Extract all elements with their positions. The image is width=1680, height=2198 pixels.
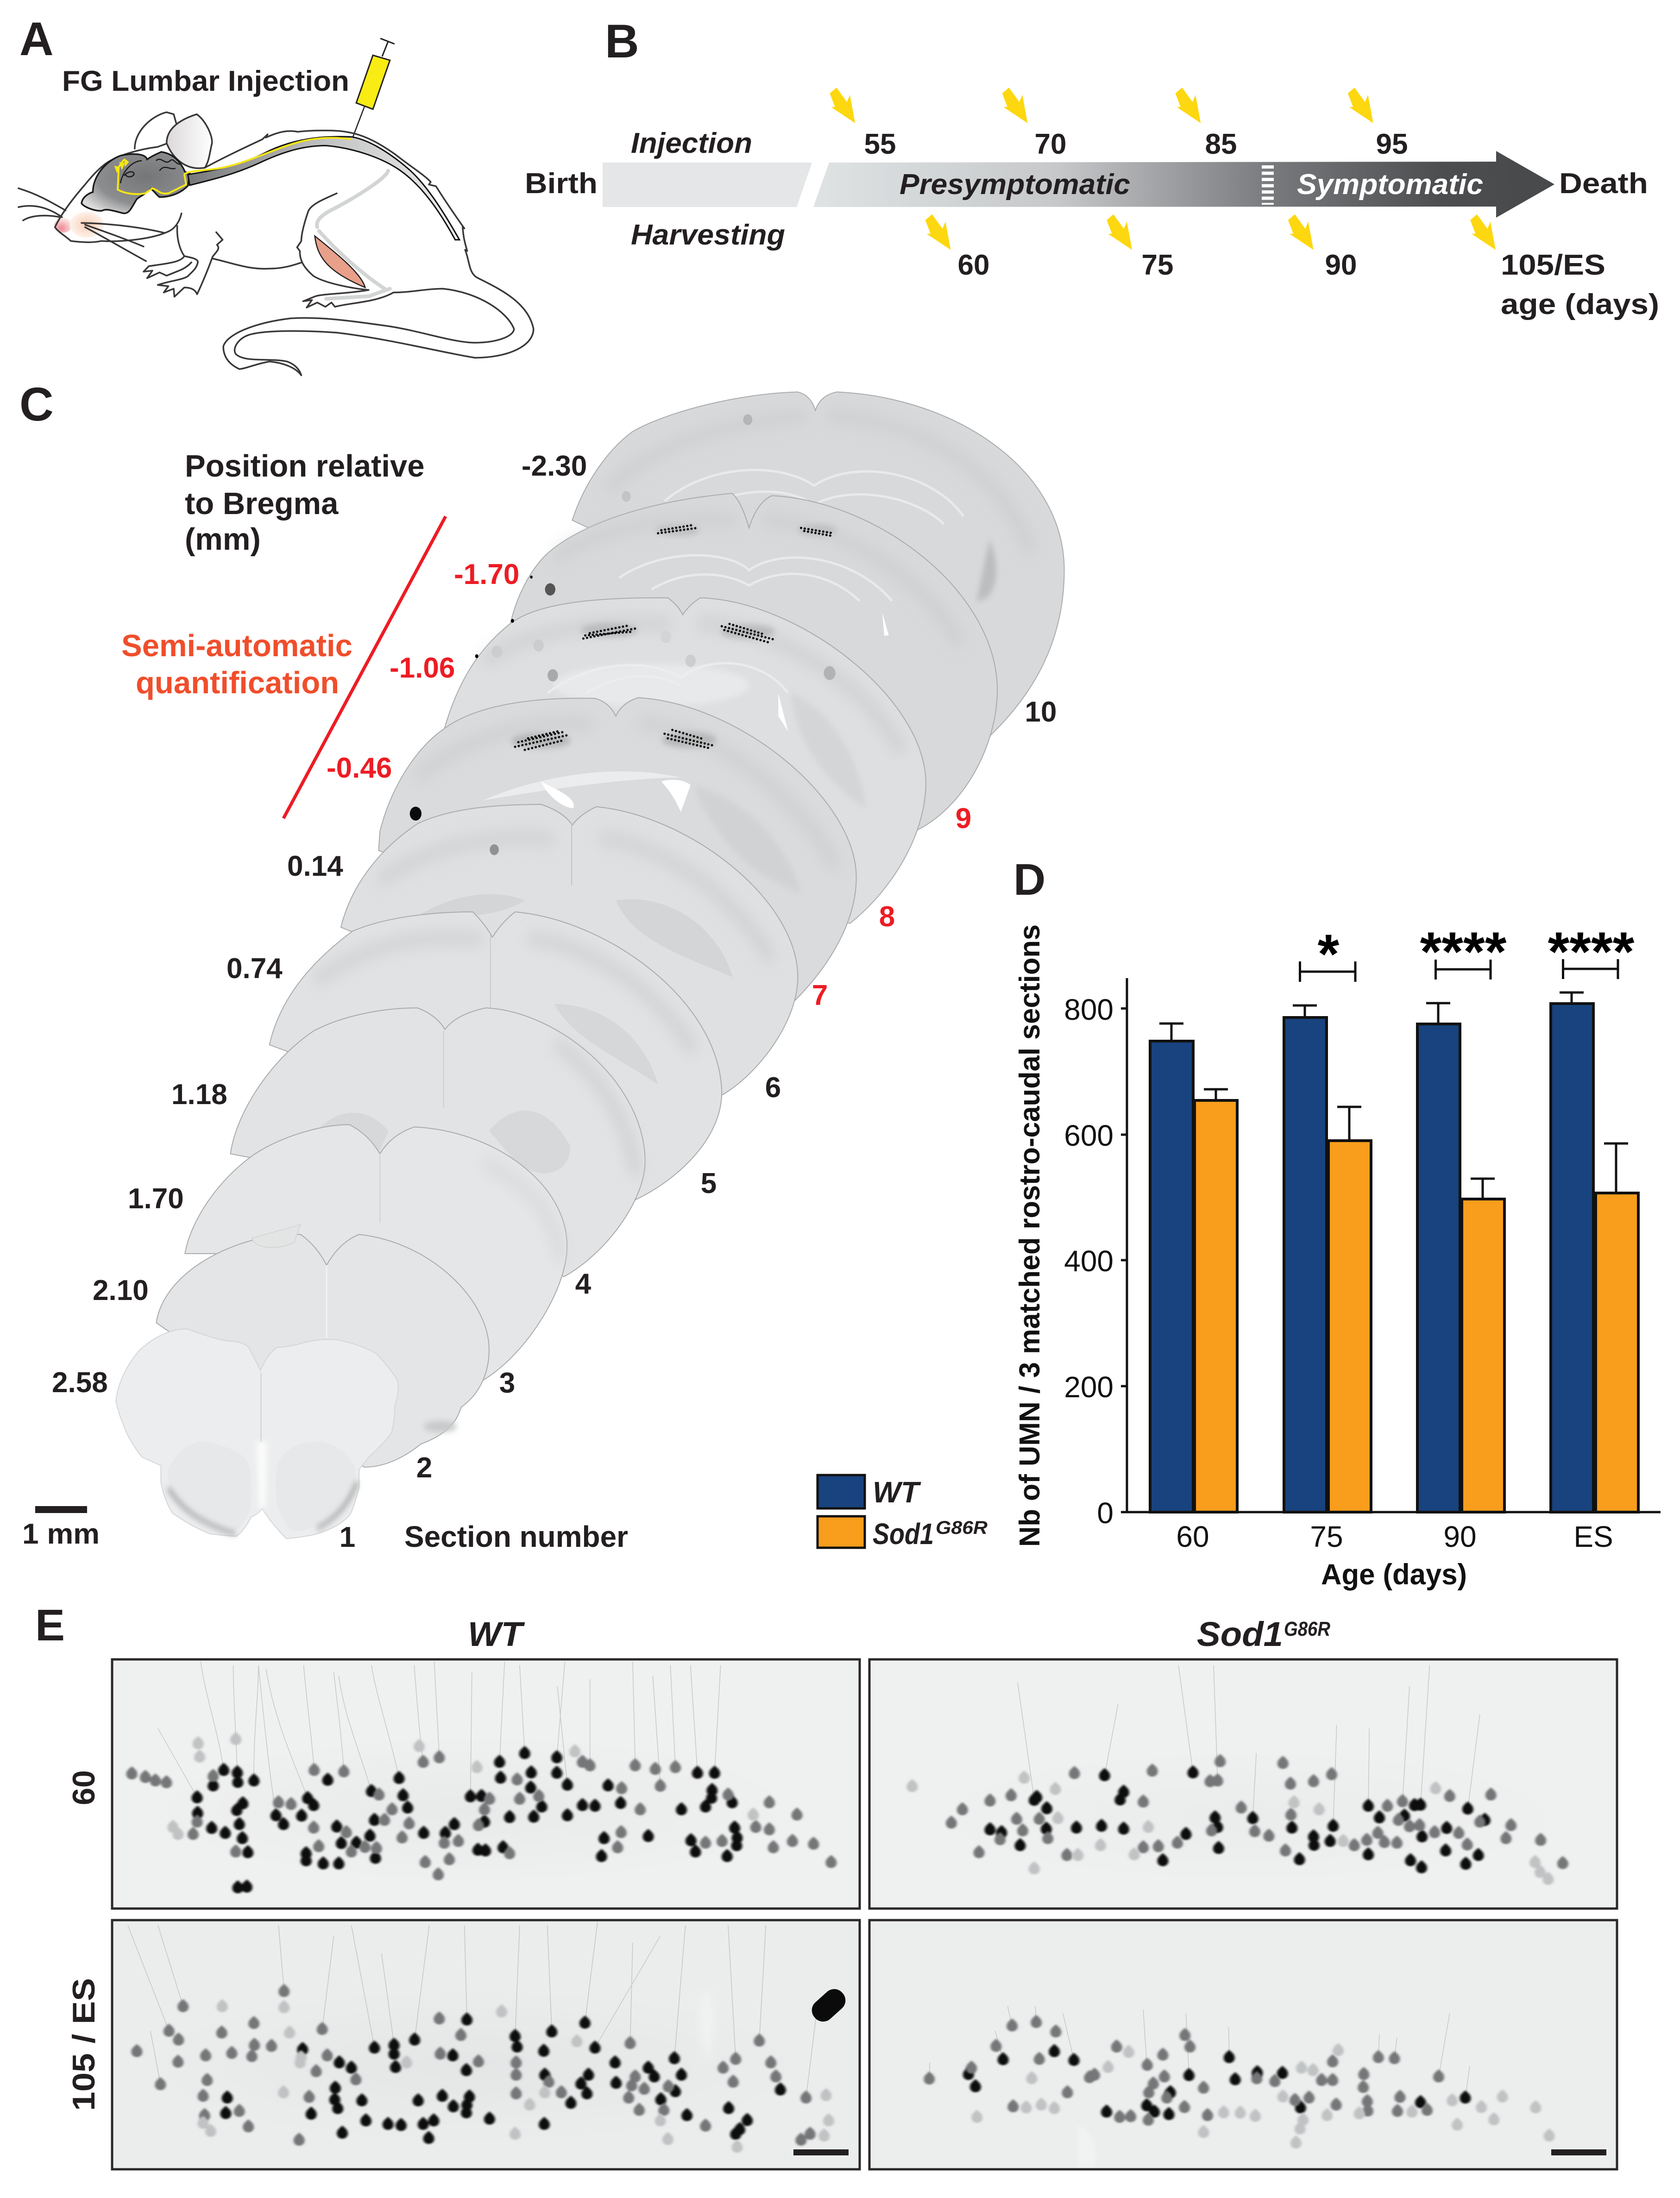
section numbers: 3 (499, 1367, 515, 1399)
bregma position heading (185, 449, 425, 557)
row label 60: 60 (66, 1770, 101, 1805)
x axis tick labels: 60 (1176, 1520, 1209, 1553)
y axis title: Nb of UMN / 3 matched rostro-caudal sections (1014, 924, 1046, 1547)
bregma position values: -1.06 (390, 652, 455, 684)
bregma position values: 1.70 (128, 1183, 184, 1215)
section 3 (185, 1124, 567, 1384)
arrows: injection and harvesting times (830, 88, 1496, 250)
column title Sod1 G86R: Sod1 (1197, 1615, 1283, 1653)
disease progression arrow (813, 151, 1554, 218)
section numbers (340, 696, 1057, 1553)
legend (818, 1475, 988, 1551)
semi-automatic quantification label: quantification (136, 666, 339, 700)
significance stars (1318, 921, 1635, 985)
section 4 (230, 1008, 645, 1277)
panel letter D: D (1013, 855, 1045, 904)
panel D: bar chart (1014, 921, 1661, 1591)
bregma position values: 1.18 (171, 1079, 227, 1111)
section number caption: Section number (404, 1520, 628, 1553)
semi-automatic quantification label (121, 628, 352, 700)
column title Sod1 G86R: G86R (1284, 1618, 1330, 1640)
y axis tick labels: 0 (1097, 1496, 1114, 1530)
section numbers: 5 (701, 1168, 717, 1199)
bregma position heading: (mm) (185, 522, 261, 557)
timeline labels: 105/ES (1501, 249, 1605, 281)
brain (82, 152, 189, 214)
timeline labels (525, 127, 1659, 320)
section 10 (572, 392, 1064, 738)
timeline labels: Harvesting (631, 219, 785, 251)
pre-injection bar (603, 163, 812, 207)
mouse body outline (55, 131, 534, 375)
timeline labels: 95 (1376, 128, 1408, 160)
timeline labels: Birth (525, 168, 598, 200)
x axis tick labels (1176, 1520, 1613, 1553)
panel letter B: B (605, 15, 639, 68)
x axis tick labels: 75 (1310, 1520, 1343, 1553)
x axis tick labels: 90 (1443, 1520, 1477, 1553)
semi-automatic quantification range line (283, 516, 446, 818)
column title WT: WT (468, 1615, 525, 1653)
section numbers: 7 (812, 980, 828, 1011)
timeline labels: Presymptomatic (900, 169, 1130, 201)
panel E: micrograph WT day 60 (112, 1659, 860, 1909)
panel C: serial brain sections (116, 392, 1064, 1539)
section numbers: 2 (416, 1452, 432, 1484)
panel E: micrograph WT day 105 / ES (112, 1920, 860, 2169)
gastrocnemius muscle (315, 236, 365, 288)
column title Sod1 G86R (1197, 1615, 1330, 1653)
panel A: mouse illustration (19, 38, 534, 375)
disease onset dashed divider (1262, 165, 1274, 205)
y axis tick labels: 200 (1064, 1370, 1114, 1404)
section numbers: 10 (1025, 696, 1057, 728)
section numbers: 4 (575, 1268, 591, 1300)
timeline labels: 90 (1325, 249, 1357, 281)
Sod1 G86R bars (1195, 1100, 1638, 1512)
timeline labels: Injection (631, 127, 752, 159)
scale bar (793, 2149, 849, 2155)
error bars (1159, 992, 1628, 1199)
bregma position values: 0.14 (287, 850, 343, 882)
section 5 (270, 912, 722, 1201)
bregma position values: 2.10 (93, 1275, 149, 1306)
scale bar 1 mm: 1 mm (22, 1518, 100, 1550)
significance stars: **** (1548, 921, 1635, 983)
section numbers: 8 (879, 901, 895, 933)
bregma position values: 0.74 (227, 953, 283, 985)
bregma position values: -2.30 (522, 450, 587, 482)
mouse nose and whisker pad (54, 212, 104, 238)
WT bars (1150, 1004, 1593, 1512)
section 6 (341, 804, 798, 1096)
x axis title: Age (days) (1321, 1558, 1467, 1591)
timeline labels: age (days) (1501, 289, 1659, 320)
significance stars: **** (1420, 921, 1507, 983)
section numbers: 1 (340, 1521, 355, 1553)
y axis tick labels: 800 (1064, 993, 1114, 1026)
whiskers (19, 188, 165, 261)
section 7 (378, 697, 856, 1004)
icon: syringe (352, 38, 395, 139)
spinal cord (188, 137, 459, 240)
timeline labels: Symptomatic (1297, 169, 1483, 201)
section 8 (444, 598, 926, 923)
row label 105 / ES: 105 / ES (66, 1978, 101, 2111)
bregma position heading: Position relative (185, 449, 425, 484)
x axis tick labels: ES (1573, 1520, 1613, 1553)
significance brackets (1300, 959, 1618, 982)
bregma position values: -0.46 (327, 752, 392, 784)
dark debris blob (807, 1984, 850, 2026)
semi-automatic quantification label: Semi-automatic (121, 628, 352, 663)
section 1 (116, 1329, 398, 1539)
legend: WT (873, 1476, 921, 1509)
mouse ears (135, 112, 212, 168)
panel letter A: A (19, 13, 54, 65)
fluorogold tracer path (114, 138, 351, 194)
section numbers: 9 (956, 803, 971, 835)
scale bar (1551, 2149, 1606, 2155)
hind limb bones (317, 171, 390, 299)
panel letter C: C (19, 378, 54, 431)
legend: Sod1 (873, 1517, 934, 1551)
timeline labels: 60 (958, 249, 989, 281)
bregma position heading: to Bregma (185, 486, 339, 521)
timeline labels: 75 (1142, 249, 1173, 281)
bregma position values (52, 450, 587, 1399)
timeline labels: 70 (1035, 128, 1066, 160)
timeline labels: 85 (1205, 128, 1237, 160)
y axis tick labels: 400 (1064, 1244, 1114, 1278)
section 9 (510, 493, 997, 831)
bregma position values: 2.58 (52, 1367, 108, 1399)
panel letter E: E (35, 1601, 65, 1650)
significance stars: * (1318, 923, 1340, 985)
panel E: micrograph Sod1 day 105 / ES (869, 1920, 1617, 2169)
y axis tick labels: 600 (1064, 1119, 1114, 1152)
injection label: FG Lumbar Injection (62, 65, 349, 97)
axes and ticks (1121, 978, 1661, 1512)
section numbers: 6 (765, 1072, 781, 1104)
timeline labels: Death (1559, 168, 1648, 200)
panel B: timeline (525, 88, 1659, 320)
legend: G86R (936, 1518, 988, 1538)
bregma position values: -1.70 (454, 559, 519, 590)
section 2 (157, 1225, 489, 1467)
y axis tick labels (1064, 993, 1114, 1530)
panel E: micrograph Sod1 day 60 (869, 1659, 1617, 1909)
timeline labels: 55 (864, 128, 896, 160)
